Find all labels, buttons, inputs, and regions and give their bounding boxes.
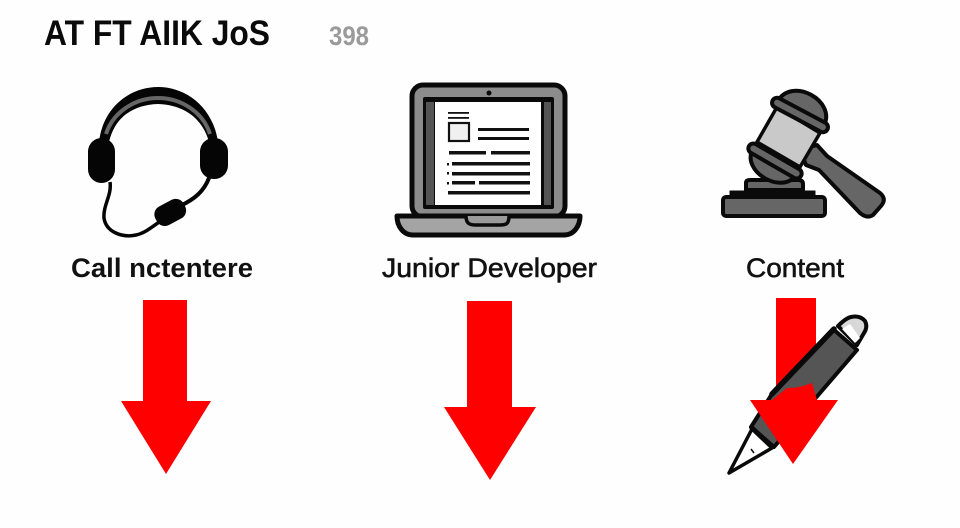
title number: 398 [329, 21, 369, 51]
icon: pen [729, 316, 866, 473]
label: junior developer: Junior Developer [382, 253, 597, 283]
label: call center: Call nctentere [71, 253, 253, 283]
label: content: Content [746, 253, 845, 283]
arrow: down head [750, 383, 838, 464]
arrow: down shaft [776, 298, 816, 402]
title: AT FT AIIK JoS [44, 14, 270, 53]
panel: junior developer [382, 85, 597, 480]
icon: gavel [723, 80, 884, 217]
arrow: down [444, 301, 536, 480]
panel: call center [71, 87, 253, 474]
icon: laptop [397, 85, 580, 235]
panel: content [723, 80, 884, 473]
icon: headset [88, 87, 228, 236]
arrow: down [121, 300, 211, 474]
